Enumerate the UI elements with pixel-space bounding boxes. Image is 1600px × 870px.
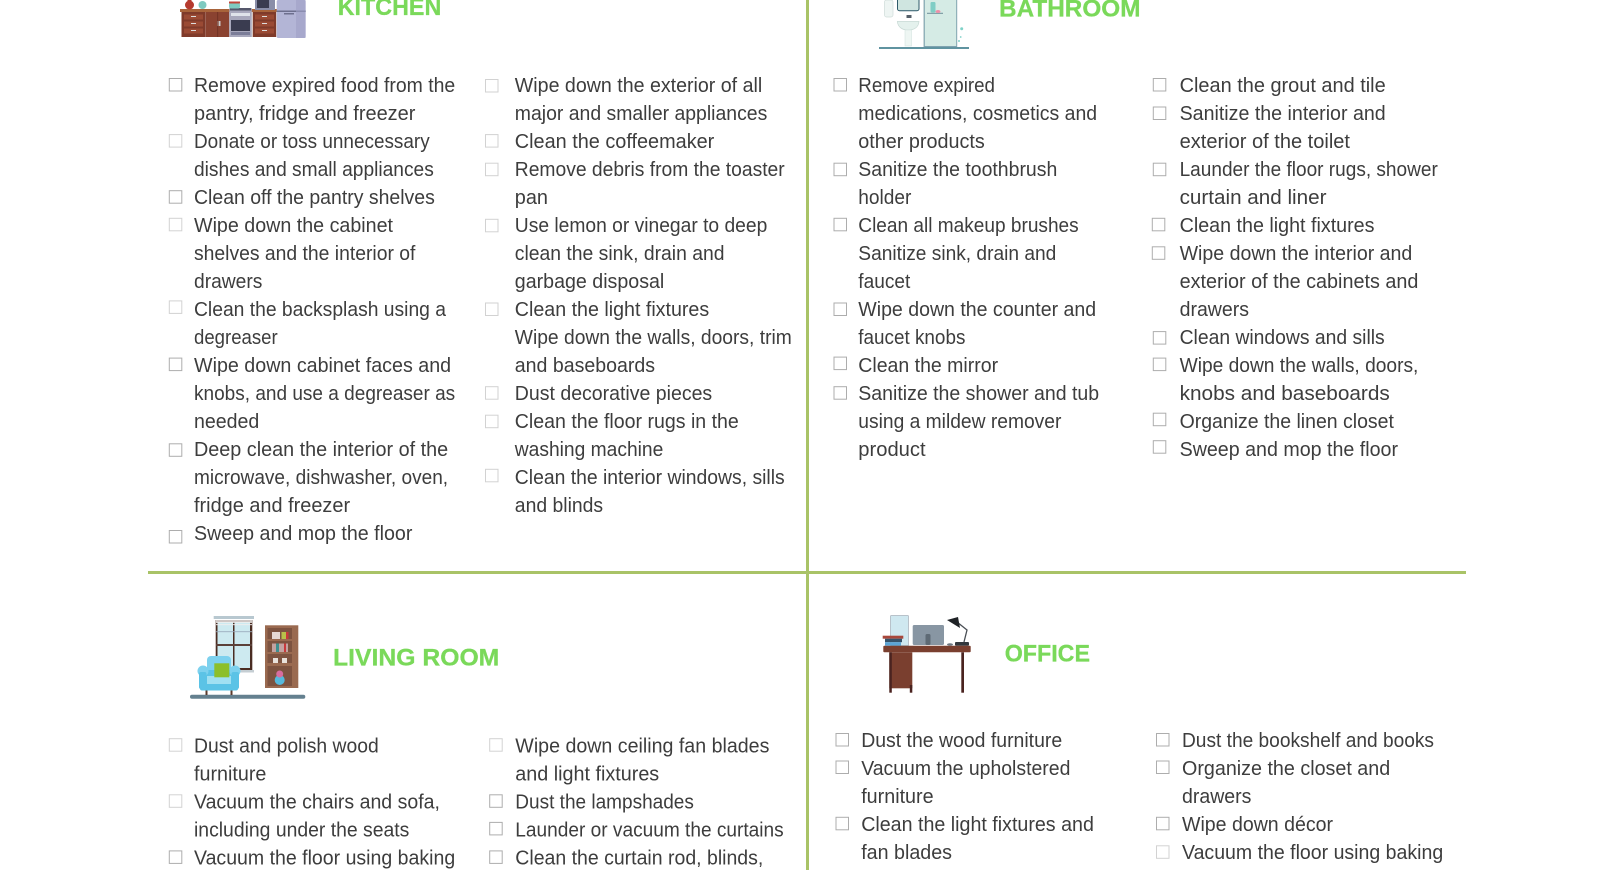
checklist text: microwave, dishwasher, oven, [194, 467, 448, 489]
checklist text: Clean the grout and tile [1180, 75, 1386, 97]
icon: bathroom sink and shower [879, 0, 969, 49]
checklist text: Clean the curtain rod, blinds, [515, 848, 763, 870]
panel: living room [169, 616, 784, 870]
checklist text: product [858, 439, 926, 461]
checklist text: Vacuum the floor using baking [1182, 842, 1443, 864]
checklist text: Launder the floor rugs, shower [1180, 159, 1438, 181]
checkboxes [169, 78, 182, 543]
checklist text: Remove debris from the toaster [515, 159, 785, 181]
checklist text: exterior of the cabinets and [1180, 271, 1418, 293]
checklist text: Sanitize sink, drain and [858, 243, 1056, 265]
checklist text: Organize the linen closet [1180, 411, 1394, 433]
checklist text: and light fixtures [515, 764, 659, 786]
checkboxes [486, 80, 498, 482]
checklist text: and baseboards [515, 355, 655, 377]
checklist text: Dust decorative pieces [515, 383, 712, 405]
checklist text: and blinds [515, 495, 603, 517]
checklist text: Wipe down the walls, doors, trim [515, 327, 792, 349]
checklist text: Wipe down the cabinet [194, 215, 393, 237]
checklist text: Deep clean the interior of the [194, 439, 448, 461]
checklist text: Organize the closet and [1182, 758, 1390, 780]
checklist text: Vacuum the chairs and sofa, [194, 792, 440, 814]
checklist text: Wipe down the exterior of all [515, 75, 762, 97]
checklist text: Dust the bookshelf and books [1182, 730, 1434, 752]
checklist text: Clean the coffeemaker [515, 131, 715, 153]
checklist text: drawers [194, 271, 262, 293]
checklist text: Dust and polish wood [194, 736, 379, 758]
checkboxes [836, 734, 848, 830]
checkboxes [1152, 78, 1166, 453]
checklist text: Clean the light fixtures and [861, 814, 1094, 836]
checklist text: knobs and baseboards [1180, 383, 1390, 405]
checklist: kitchen column 1 [169, 75, 455, 545]
checklist text: Clean the floor rugs in the [515, 411, 739, 433]
checklist text: Clean the light fixtures [515, 299, 709, 321]
checklist text [514, 75, 792, 517]
checkboxes [1156, 734, 1169, 858]
checklist text: Sanitize the interior and [1180, 103, 1386, 125]
checklist: office column 2 [1156, 730, 1443, 864]
checklist text: shelves and the interior of [194, 243, 416, 265]
checklist text: Wipe down décor [1182, 814, 1333, 836]
checklist text: medications, cosmetics and [858, 103, 1097, 125]
checklist text: Sweep and mop the floor [194, 523, 413, 545]
checklist text: faucet knobs [858, 327, 965, 349]
checklist text: using a mildew remover [858, 411, 1062, 433]
checklist text: Clean the backsplash using a [194, 299, 447, 321]
checklist text: Wipe down the interior and [1180, 243, 1412, 265]
checklist text: Sanitize the toothbrush [858, 159, 1057, 181]
checklist text [515, 736, 784, 870]
checklist text: pan [515, 187, 548, 209]
checklist text: Wipe down the counter and [858, 299, 1096, 321]
checklist text: Use lemon or vinegar to deep [515, 215, 767, 237]
checklist: kitchen column 2 [486, 75, 792, 517]
checklist text: Wipe down the walls, doors, [1180, 355, 1418, 377]
checklist text: furniture [861, 786, 934, 808]
checklist text: including under the seats [194, 820, 409, 842]
checkboxes [834, 78, 846, 399]
checklist text: Donate or toss unnecessary [194, 131, 430, 153]
checklist text: washing machine [514, 439, 663, 461]
panel: kitchen [169, 0, 792, 545]
checklist text: Clean the interior windows, sills [515, 467, 785, 489]
checklist text: faucet [858, 271, 911, 293]
checklist text: needed [194, 411, 259, 433]
checklist text: exterior of the toilet [1180, 131, 1350, 153]
checklist text: Wipe down ceiling fan blades [515, 736, 769, 758]
checklist text: knobs, and use a degreaser as [194, 383, 455, 405]
checklist text: Remove expired food from the [194, 75, 455, 97]
checklist text: Clean off the pantry shelves [194, 187, 435, 209]
checklist text [194, 75, 455, 545]
checklist text: Vacuum the upholstered [861, 758, 1070, 780]
checklist text: Clean the light fixtures [1180, 215, 1374, 237]
panel: office [836, 616, 1443, 864]
checklist text: Clean the mirror [858, 355, 998, 377]
checklist text: furniture [194, 764, 266, 786]
checklist text: Wipe down cabinet faces and [194, 355, 451, 377]
checklist text [1180, 75, 1438, 461]
checklist text: Vacuum the floor using baking [194, 848, 455, 870]
panel: bathroom [834, 0, 1438, 461]
heading: office: OFFICE [1005, 641, 1090, 668]
checklist text: dishes and small appliances [194, 159, 434, 181]
checklist text: garbage disposal [515, 271, 664, 293]
checklist text: holder [858, 187, 912, 209]
checklist text: curtain and liner [1180, 187, 1327, 209]
checklist text: major and smaller appliances [515, 103, 767, 125]
icon: office desk with computer and lamp [883, 616, 971, 693]
checklist text: Clean all makeup brushes [858, 215, 1079, 237]
checklist text [861, 730, 1094, 864]
checklist text: Sanitize the shower and tub [858, 383, 1099, 405]
checklist text: clean the sink, drain and [515, 243, 724, 265]
icon: armchair, window and bookshelf [190, 616, 305, 699]
checklist text [194, 736, 455, 870]
checklist: living room column 2 [490, 736, 784, 870]
checklist text [1182, 730, 1443, 864]
icon: kitchen counter and appliances [180, 0, 306, 38]
heading: living room: LIVING ROOM [333, 645, 499, 672]
checklist: living room column 1 [169, 736, 455, 870]
checklist text: Remove expired [858, 75, 995, 97]
checklist text: fridge and freezer [194, 495, 350, 517]
checklist: office column 1 [836, 730, 1094, 864]
checklist text: Dust the wood furniture [861, 730, 1062, 752]
checklist text: Clean windows and sills [1180, 327, 1385, 349]
checklist text: Sweep and mop the floor [1180, 439, 1398, 461]
checklist text: Launder or vacuum the curtains [515, 820, 784, 842]
checklist text: other products [858, 131, 985, 153]
checklist text: drawers [1182, 786, 1251, 808]
checklist text: fan blades [861, 842, 952, 864]
checklist text [858, 75, 1099, 461]
checklist text: Dust the lampshades [515, 792, 694, 814]
checklist text: drawers [1180, 299, 1249, 321]
checklist: bathroom column 2 [1152, 75, 1438, 461]
checklist: bathroom column 1 [834, 75, 1099, 461]
checkboxes [490, 739, 502, 863]
checklist text: pantry, fridge and freezer [194, 103, 416, 125]
checkboxes [169, 739, 182, 863]
checklist text: degreaser [194, 327, 278, 349]
